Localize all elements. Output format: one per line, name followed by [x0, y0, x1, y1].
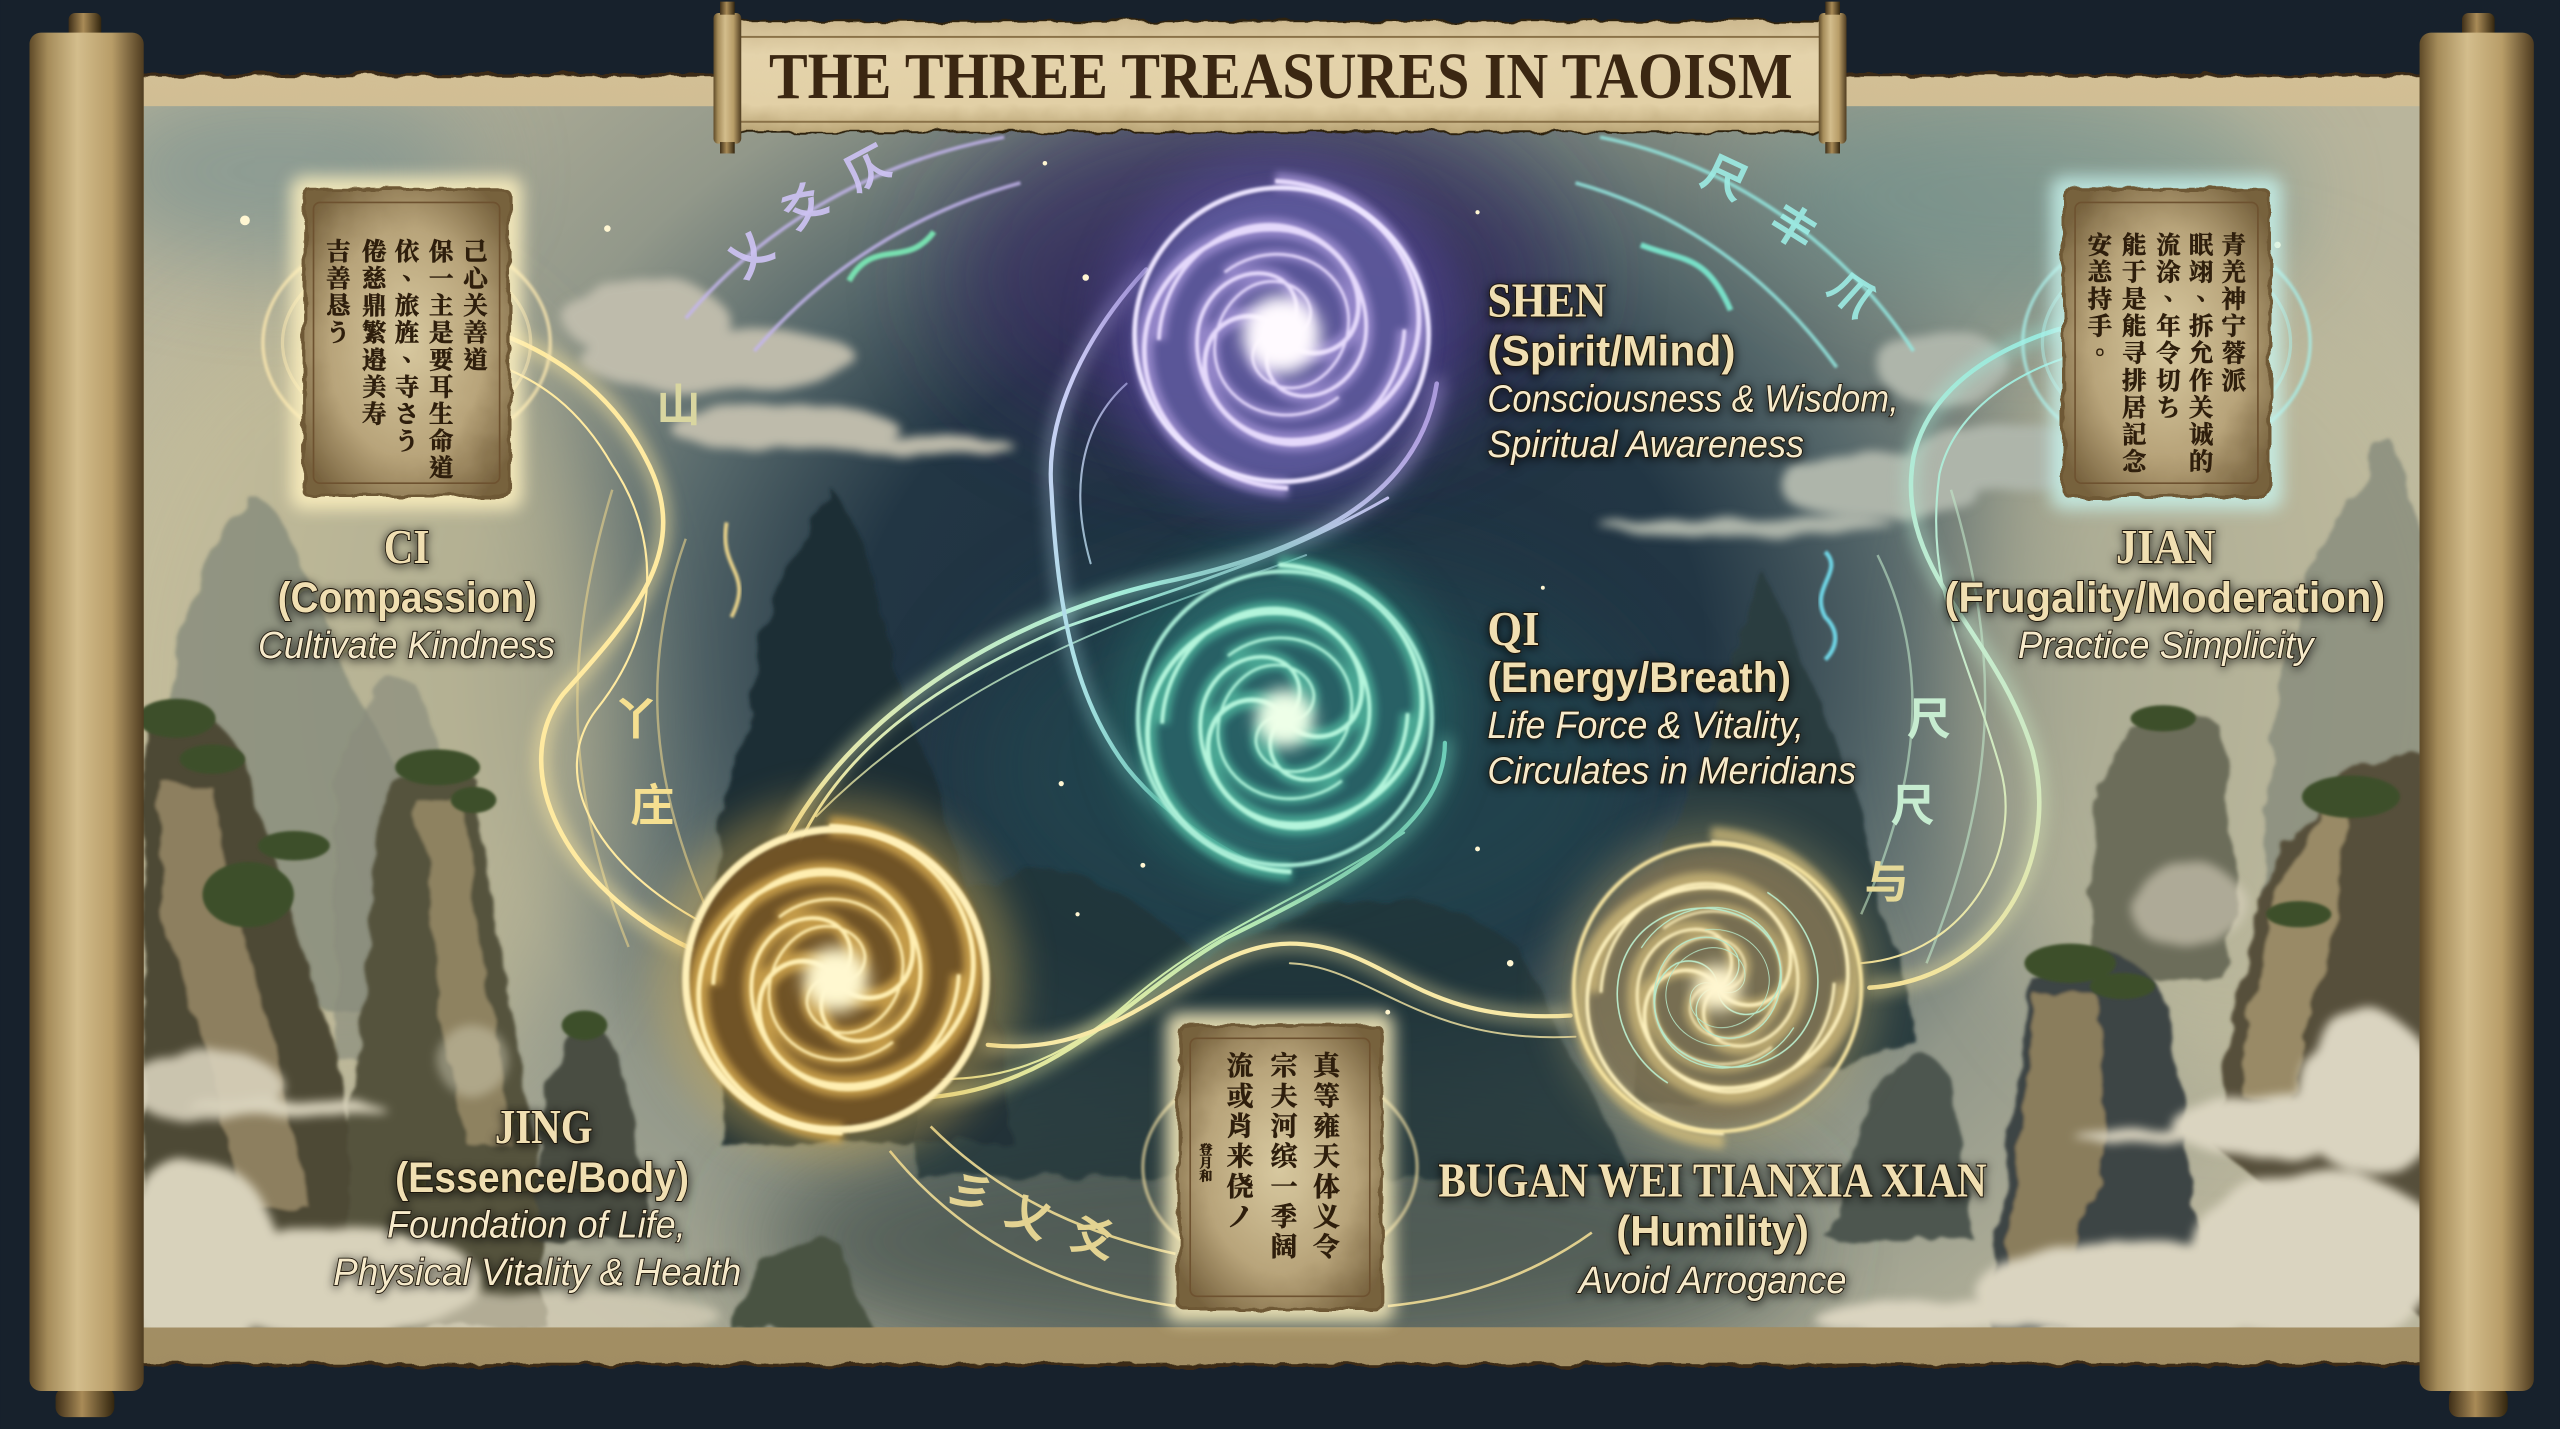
rune ring: purple top left: 乂 [718, 223, 783, 288]
label: Qi: Circulates in Meridians [1487, 750, 1856, 792]
cliff: center pillar lit face [2005, 996, 2106, 1290]
tablet calligraphy: 真等雍天体义令 [1309, 1051, 1340, 1263]
tablet glow [2051, 176, 2282, 509]
tablet calligraphy [1197, 1051, 1340, 1263]
cliff: left second pillar [335, 764, 547, 1327]
cliff: right center pillar with trees [1989, 953, 2204, 1327]
wide bands [699, 826, 973, 1133]
clouds: upper middle left [563, 279, 1012, 452]
tablet calligraphy: 吉善恳う [323, 238, 350, 347]
panel: misty landscape painting [144, 106, 2420, 1328]
green accents [1581, 847, 1854, 1129]
roller body [29, 33, 144, 1391]
rune ring: teal top right: 爪 [1819, 262, 1884, 328]
main strokes [1587, 842, 1848, 1134]
core glow [1242, 295, 1321, 374]
cliff: left low rock [539, 1028, 653, 1241]
rune ring: purple top left: 仄 [837, 138, 899, 201]
rune ring: teal and gold right: 尺 [1907, 696, 1951, 745]
outer ring [1138, 571, 1432, 865]
title banner [713, 2, 1847, 153]
glow ring: Jian tablet [2023, 229, 2310, 457]
dim disc [1579, 849, 1856, 1126]
wide bands [1148, 565, 1422, 872]
banner right rod [1819, 13, 1847, 144]
halo [1554, 824, 1881, 1151]
outer ring [686, 829, 986, 1130]
flow: Shen to Jing [771, 384, 1437, 873]
label: Jian [1944, 519, 2385, 666]
spiral: Humility (pale gold) [1554, 824, 1881, 1151]
core glow [1695, 965, 1740, 1011]
tablet calligraphy: 登月和 [1197, 1142, 1212, 1183]
glow ring: Ci tablet [263, 232, 550, 454]
core glow [1256, 689, 1314, 748]
bottom knob [2449, 1388, 2508, 1417]
right scroll roller [2420, 13, 2534, 1417]
mountain: center right dark peak [1633, 571, 1918, 1110]
label: Bugan Wei Tianxia Xian: (Humility) [1616, 1208, 1809, 1255]
glow: warm mist on left [65, 294, 620, 1110]
cliff: right tall pillar [2212, 754, 2433, 1327]
label: Jian: JIAN [2116, 519, 2215, 574]
label: Shen [1487, 273, 1899, 465]
label: Jing: JING [495, 1099, 593, 1154]
nebula disc [1141, 575, 1429, 862]
top knob [2462, 13, 2495, 39]
rune ring: purple top left [686, 137, 1020, 351]
tablet: Ci [291, 176, 522, 509]
label: Ci [258, 519, 555, 666]
clouds: bottom left [114, 1025, 718, 1355]
spiral: Qi (teal) [1109, 542, 1461, 895]
rune ring: teal top right: 尺 [1694, 148, 1754, 211]
label: Jing: (Essence/Body) [395, 1154, 689, 1201]
wide bands [1580, 834, 1855, 1141]
label: Jing [333, 1099, 741, 1293]
pine trees [137, 699, 2400, 1040]
label: Ci: CI [384, 519, 429, 574]
rune ring: gold left: 丫 [614, 696, 658, 745]
glow: purple nebula [947, 98, 1567, 457]
mountain: far left mid [335, 682, 522, 1061]
bottom knob [56, 1388, 114, 1417]
tablet calligraphy: 依、旅旌、寺さう [391, 238, 419, 455]
rune ring: gold left [577, 382, 739, 947]
mountain: far right peak [2253, 441, 2433, 980]
nebula halo [1099, 152, 1464, 518]
tablet calligraphy [2084, 231, 2246, 476]
rune ring: teal top right [1575, 137, 1913, 367]
rune ring: gold bottom: 乂 [998, 1186, 1059, 1249]
spiral: Jing (gold) [653, 797, 1019, 1162]
tablet calligraphy: 保一主是要耳生命道 [426, 238, 453, 482]
label: Bugan Wei Tianxia Xian: BUGAN WEI TIANXIA XIAN [1438, 1153, 1987, 1208]
tablet calligraphy: 流涂、年令切ち [2153, 231, 2180, 421]
tablet inner border [2075, 202, 2258, 483]
label: Qi [1487, 601, 1856, 792]
rune ring: gold left: 庄 [630, 782, 674, 831]
tablet calligraphy: 倦慈鼎繁邉美寿 [359, 238, 386, 428]
rune ring: purple top left: 爻 [773, 175, 837, 240]
rune ring: gold left: 山 [656, 382, 700, 431]
glow ring: bottom tablet [1143, 1063, 1417, 1272]
flow: Humility to Jian [1861, 313, 2147, 988]
spiral: Shen (purple) [1099, 152, 1464, 518]
cliff: second pillar lit face [416, 800, 509, 1143]
mountain: center low ridge [914, 871, 1633, 1175]
earthy disc [686, 829, 986, 1130]
cliff: lower center right rock [1829, 1058, 1975, 1241]
label: Ci: (Compassion) [278, 574, 537, 621]
label: Qi: Life Force & Vitality, [1487, 704, 1804, 746]
label: Shen: Spiritual Awareness [1487, 423, 1804, 465]
label: Shen: SHEN [1487, 273, 1607, 328]
rune ring: teal and gold right [1821, 490, 1985, 963]
glow: warm mist on right [1914, 320, 2413, 1074]
cliffs left [144, 706, 2433, 1327]
flow lines [263, 229, 2310, 1272]
cliff: left lit rock face [163, 784, 310, 1208]
label: Ci: Cultivate Kindness [258, 624, 555, 666]
tablet glow [291, 176, 522, 509]
tablet: Jian [2051, 176, 2282, 509]
halo [653, 797, 1019, 1162]
label: Bugan Wei Tianxia Xian [1438, 1153, 1987, 1301]
nebula halo [1109, 542, 1461, 895]
clouds: bottom right [1812, 864, 2449, 1342]
mountain: lower center left hill [733, 1235, 873, 1331]
label: Shen: (Spirit/Mind) [1487, 328, 1735, 375]
label: Qi: (Energy/Breath) [1487, 654, 1791, 701]
main strokes [1144, 181, 1419, 488]
tablet calligraphy: 安恙持手。 [2084, 231, 2112, 367]
banner paper [731, 21, 1829, 132]
tablet calligraphy: 己心关善道 [459, 238, 487, 374]
tablet: bottom [1166, 1012, 1394, 1322]
tablet paper [1179, 1025, 1381, 1309]
wide bands [1144, 181, 1419, 488]
label: Bugan Wei Tianxia Xian: Avoid Arrogance [1577, 1259, 1847, 1301]
cliff: right pillar far [2086, 712, 2240, 980]
tablet calligraphy: 青羌神宁蓉派 [2218, 231, 2246, 394]
glow: teal nebula [963, 555, 1649, 980]
tablet glow [1166, 1012, 1394, 1322]
label: Jing: Physical Vitality & Health [333, 1251, 741, 1293]
flow: Qi to Jing [735, 743, 1445, 1098]
main strokes [699, 826, 973, 1133]
tablet paper [2064, 189, 2269, 496]
banner left rod [713, 13, 741, 144]
rune ring: teal and gold right: 尺 [1891, 782, 1935, 831]
rune ring: gold bottom: 爻 [1065, 1210, 1120, 1268]
cliff: left tall pillar [144, 706, 379, 1327]
roller body [2420, 33, 2534, 1391]
label: Jian: Practice Simplicity [2018, 624, 2316, 666]
cliff: right pillar lit face [2240, 800, 2351, 1110]
labels [258, 273, 2385, 1301]
tablet paper [304, 189, 509, 496]
rune ring: gold bottom [890, 1126, 1592, 1306]
tablet inner border [1190, 1038, 1370, 1296]
mountain: far left peak [163, 498, 421, 1012]
tablet calligraphy [323, 238, 487, 482]
banner rod finials [720, 2, 1840, 153]
flow: Jing to Ci [465, 323, 702, 950]
clouds: upper middle right [1600, 331, 2106, 535]
flow: Shen left side down past Qi [1051, 269, 1249, 862]
tablet calligraphy: 能于是能寻排居記念 [2119, 231, 2146, 476]
mountain: center left dark peak [718, 490, 1012, 1143]
label: Shen: Consciousness & Wisdom, [1487, 377, 1899, 419]
rune ring: gold bottom: 彡 [939, 1161, 1001, 1226]
banner rule top [731, 36, 1829, 38]
banner rule bottom [731, 121, 1829, 123]
glow: teal sky top right [1747, 82, 2302, 310]
outer ring [1135, 188, 1429, 482]
label: Jing: Foundation of Life, [387, 1203, 686, 1245]
top knob [69, 13, 101, 39]
tablet calligraphy: 宗夫河缤一季阔 [1267, 1051, 1297, 1263]
flow: Jing to Humility [988, 944, 1575, 1046]
distant mountains [163, 441, 2433, 1331]
glow: teal sky top left [82, 82, 474, 261]
label: Jian: (Frugality/Moderation) [1944, 574, 2385, 621]
rune ring: teal top right: 丰 [1761, 195, 1825, 260]
stars [240, 161, 2281, 1015]
label: Qi: QI [1487, 601, 1540, 656]
main strokes [1148, 565, 1422, 872]
tablet calligraphy: 眠翊、拆允作关诚的 [2186, 231, 2213, 476]
outer ring [1574, 844, 1861, 1131]
title text: THE THREE TREASURES IN TAOISM [769, 41, 1793, 113]
nebula disc [1135, 188, 1429, 482]
tablet calligraphy: 流或肖来侥ノ [1223, 1051, 1253, 1233]
left scroll roller [29, 13, 144, 1417]
rune ring: teal and gold right: 与 [1864, 859, 1909, 908]
core glow [803, 947, 869, 1012]
glow: lower center warm shade [759, 1110, 1804, 1371]
tablet inner border [314, 202, 500, 483]
